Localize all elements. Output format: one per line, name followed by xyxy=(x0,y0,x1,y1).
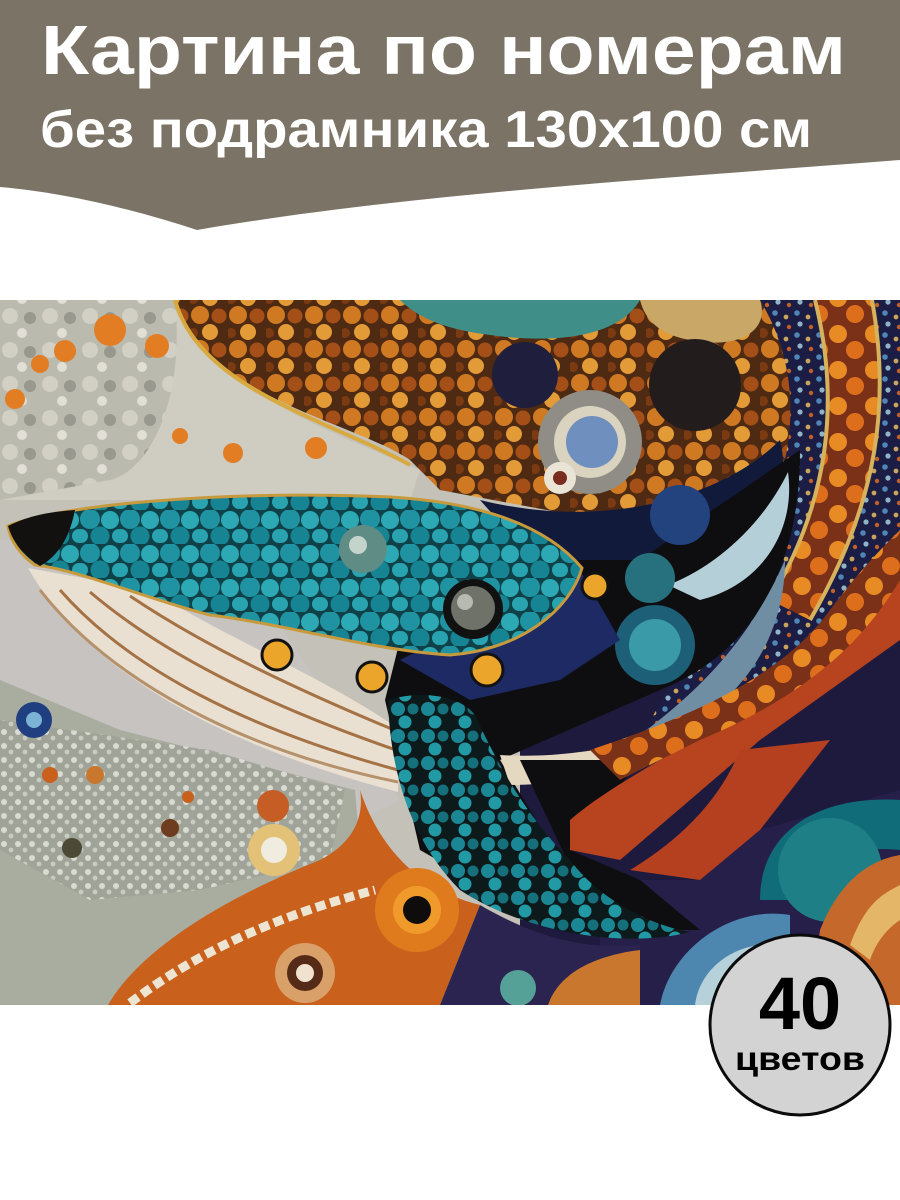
teal swirl lower right xyxy=(760,800,900,900)
header banner xyxy=(0,0,900,230)
badge label: цветов xyxy=(735,1040,865,1077)
red band xyxy=(570,530,900,860)
orange arc bottom xyxy=(548,950,640,1005)
ornament circles on the back xyxy=(615,605,695,685)
scattered beads top left xyxy=(5,314,327,463)
scattered beads bottom left xyxy=(16,702,300,876)
pebble area top left xyxy=(0,300,420,500)
grey-blue feather xyxy=(640,560,785,735)
dark underlay on the right half xyxy=(520,640,900,946)
title: Картина по номерам xyxy=(41,11,846,89)
whale fluke stripe right xyxy=(500,750,600,785)
plum wedge bottom xyxy=(440,905,600,1005)
painting: mosaic whale xyxy=(0,300,900,1006)
large orange shape bottom xyxy=(108,790,480,1005)
whale flipper xyxy=(388,695,690,939)
dark plum lower right xyxy=(600,790,900,1005)
lower red shape xyxy=(630,740,830,880)
teal swirl at top xyxy=(400,300,640,339)
gold beads under the head xyxy=(262,573,608,692)
light gray area behind the whale head xyxy=(0,540,400,830)
right navy dotted field xyxy=(640,300,900,740)
snout dark tip xyxy=(8,510,75,566)
blue wave behind whale xyxy=(480,440,783,560)
whale dark back xyxy=(385,450,800,858)
central medallion xyxy=(538,390,642,494)
pale streak xyxy=(668,472,789,600)
orange ring band at right xyxy=(780,300,878,620)
upper orange mosaic xyxy=(177,300,790,512)
big eye orbs in orange shape xyxy=(375,868,459,952)
blue swirl xyxy=(650,485,710,545)
whale belly xyxy=(28,568,400,792)
white bead stripe xyxy=(130,890,375,1003)
blue scales at bottom xyxy=(660,914,790,1005)
dark circles upper xyxy=(649,339,741,431)
subtitle: без подрамника 130x100 см xyxy=(40,101,812,159)
lower left gray-green sea xyxy=(0,680,360,1005)
teal bead at bottom xyxy=(500,970,536,1006)
eye xyxy=(443,579,503,639)
orange bead band xyxy=(590,530,900,780)
whale head: teal mosaic xyxy=(8,495,582,655)
badge number: 40 xyxy=(759,962,841,1045)
background: light sea xyxy=(0,390,554,1005)
badge: 40 colours xyxy=(710,935,890,1115)
second eye orb xyxy=(339,525,387,573)
black wedge beside the flipper xyxy=(520,760,700,930)
